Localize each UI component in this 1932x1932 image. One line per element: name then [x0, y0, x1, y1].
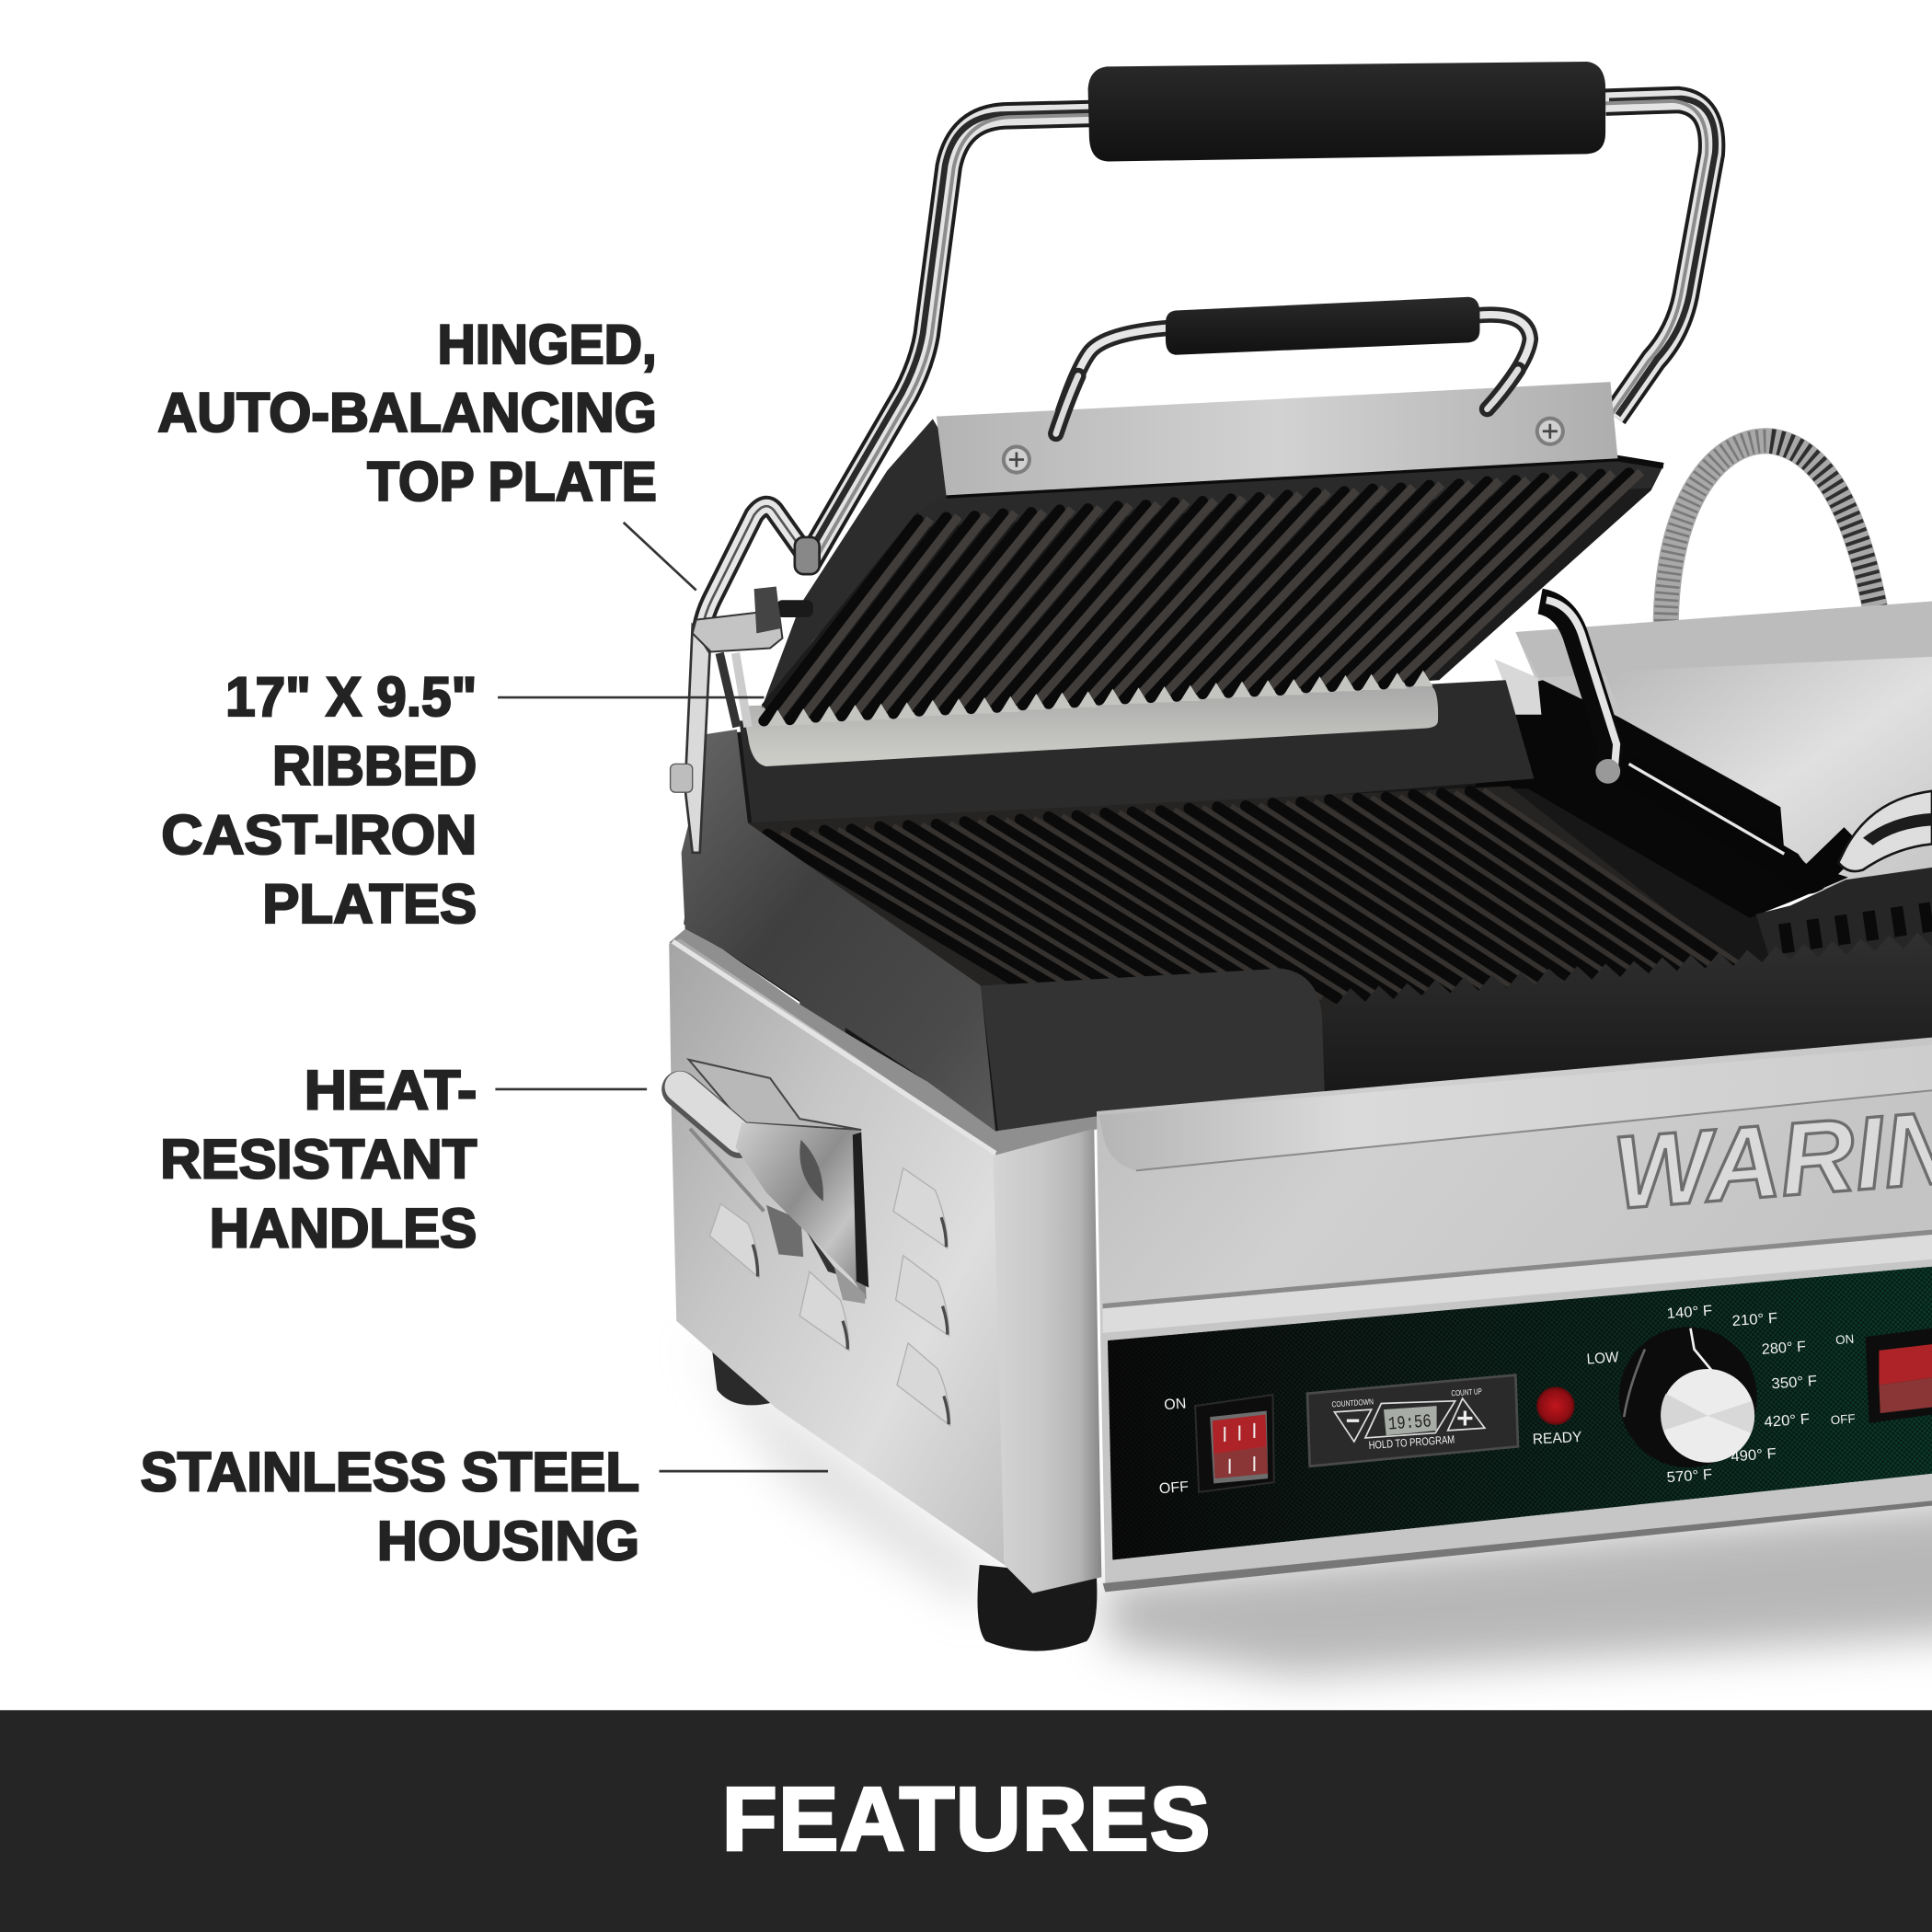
ready light — [1532, 1386, 1582, 1448]
temperature scale: 280° F — [1761, 1339, 1807, 1358]
timer display: COUNT UP — [1451, 1386, 1482, 1397]
large handle grip — [1088, 62, 1605, 161]
temperature scale: 140° F — [1666, 1303, 1713, 1322]
bottom teeth — [767, 671, 1433, 726]
right handle — [1540, 600, 1932, 880]
callout: hinged top plate: AUTO-BALANCING — [157, 381, 657, 443]
small arm ends over bracket — [1056, 370, 1518, 433]
side housing — [669, 939, 1005, 1565]
side latch handle — [680, 1060, 868, 1304]
grill illustration — [669, 62, 1932, 1651]
hinge loop — [702, 506, 807, 628]
top band — [918, 458, 1663, 527]
temperature scale: 420° F — [1764, 1410, 1811, 1431]
toothed front face — [1097, 933, 1932, 1121]
callout: ribbed plates: RIBBED — [272, 734, 477, 797]
leader line: handles — [495, 1088, 647, 1090]
power switch right: OFF — [1830, 1411, 1856, 1427]
small handle grip — [1166, 297, 1479, 355]
corner post — [993, 1129, 1101, 1593]
callout: hinged top plate — [157, 313, 657, 512]
hinge bolt — [754, 587, 781, 633]
chrome handle loop — [1838, 791, 1932, 871]
hinge ball — [795, 537, 820, 574]
large handle arms — [803, 98, 1716, 566]
front left block — [981, 969, 1325, 1131]
callout: handles — [160, 1058, 477, 1259]
ribbed surface — [740, 786, 1762, 1023]
right lower ribs — [1755, 868, 1932, 973]
lower cast-iron plate — [682, 680, 1932, 1131]
latch bracket — [766, 1205, 803, 1257]
lip — [1099, 1045, 1932, 1170]
callout: housing — [141, 1441, 639, 1572]
side embossed tabs — [709, 1168, 950, 1426]
callout: handles: RESISTANT — [160, 1127, 477, 1190]
callout: housing: STAINLESS STEEL — [141, 1441, 639, 1503]
rear rods — [719, 653, 737, 727]
upper cast-iron plate — [762, 419, 1663, 726]
tab shadows — [753, 1217, 949, 1424]
leader line: cast-iron plates — [498, 696, 764, 698]
steel flange — [669, 929, 1099, 1156]
callout: handles: HEAT- — [305, 1058, 477, 1121]
leader line: top plate — [624, 523, 696, 591]
footer title: FEATURES — [722, 1768, 1210, 1869]
drip bar — [742, 685, 1438, 766]
callout: ribbed plates — [161, 665, 477, 935]
temperature knob — [1619, 1327, 1757, 1467]
plate dark edge — [853, 1133, 868, 1288]
power switch left: OFF — [1158, 1478, 1190, 1497]
power switch left: ON — [1164, 1395, 1187, 1413]
silver tab — [1495, 660, 1541, 715]
temperature scale: 570° F — [1666, 1466, 1713, 1486]
leader line: housing — [660, 1470, 828, 1472]
power switch right — [1830, 1328, 1932, 1427]
latch flap — [689, 1060, 861, 1130]
bracket screws — [1002, 417, 1565, 475]
timer display: HOLD TO PROGRAM — [1368, 1432, 1455, 1452]
small handle arms — [1056, 315, 1530, 433]
control panel — [1100, 1259, 1932, 1592]
spring hose — [1666, 441, 1885, 665]
callout: ribbed plates: PLATES — [262, 872, 477, 935]
hinge pin — [776, 600, 813, 617]
latch strut — [690, 1129, 764, 1212]
callout: hinged top plate: TOP PLATE — [367, 450, 657, 512]
temperature scale: LOW — [1586, 1349, 1620, 1368]
callout: handles: HANDLES — [210, 1196, 477, 1259]
latch bar — [680, 1089, 740, 1140]
footer band — [0, 1710, 1932, 1932]
side screw — [671, 764, 693, 792]
foot: front — [977, 1565, 1097, 1651]
steel bracket — [937, 382, 1617, 495]
latch plate — [736, 1122, 867, 1300]
temperature scale: 350° F — [1771, 1373, 1818, 1392]
hinge bracket — [693, 610, 782, 651]
side face — [682, 730, 995, 1131]
timer display: COUNTDOWN — [1331, 1397, 1374, 1409]
floor shadow — [690, 1337, 1932, 1675]
callout: hinged top plate: HINGED, — [437, 313, 657, 375]
grill base underlay — [684, 680, 1932, 1133]
ready light: READY — [1532, 1429, 1582, 1448]
back wall — [740, 680, 1534, 840]
long hinge rod — [685, 626, 709, 853]
plate reflections — [799, 1140, 823, 1202]
front steel panel — [1097, 1038, 1932, 1333]
right press plate — [1472, 600, 1932, 973]
callout: ribbed plates: CAST-IRON — [161, 803, 477, 866]
hinge assembly — [671, 506, 820, 853]
temperature scale: 210° F — [1731, 1310, 1778, 1329]
temperature scale: 490° F — [1731, 1445, 1777, 1465]
foot: back — [712, 1351, 774, 1405]
timer display — [1307, 1375, 1518, 1466]
timer display: 19:56 — [1387, 1411, 1432, 1436]
callout: ribbed plates: 17" X 9.5" — [225, 665, 477, 728]
callout: housing: HOUSING — [377, 1510, 639, 1572]
power switch right: ON — [1835, 1332, 1855, 1347]
temperature scale — [1586, 1303, 1818, 1486]
power switch left — [1158, 1395, 1274, 1497]
